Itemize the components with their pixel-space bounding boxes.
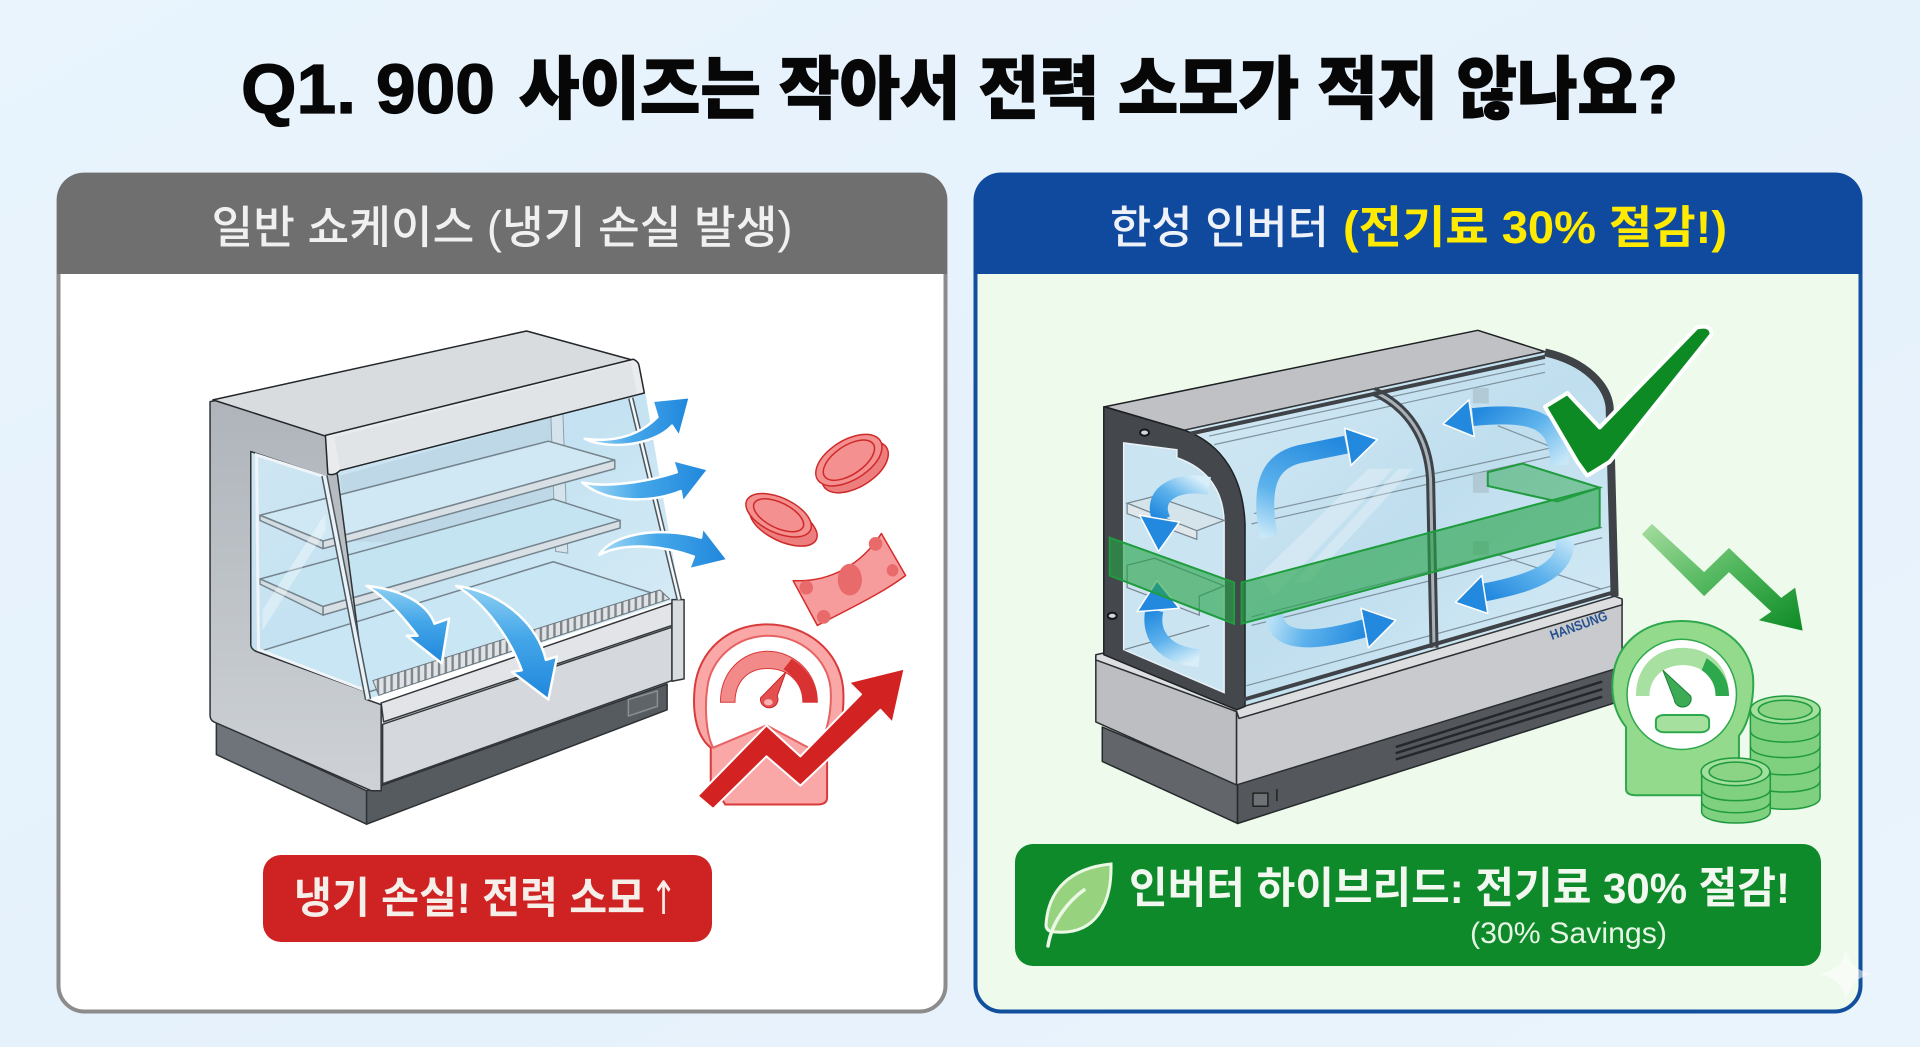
centre door frame [1373, 391, 1434, 648]
shelves [260, 441, 667, 693]
sparkle mark [1820, 950, 1872, 1000]
window and cabinet glass backing [251, 393, 680, 700]
base body [1096, 596, 1622, 785]
plinth [216, 684, 667, 824]
icon: leaf [1046, 864, 1111, 946]
lower front [381, 600, 684, 784]
panel body [58, 174, 946, 1012]
icon: red coins [735, 426, 901, 555]
arrow heads [1137, 400, 1488, 648]
callout headline: 인버터 하이브리드: 전기료 30% 절감! [1129, 865, 1790, 913]
panel header: Hansung inverter: 한성 인버터 [1110, 202, 1329, 253]
icon: red rising arrow [698, 669, 905, 809]
front glass [1184, 352, 1615, 706]
drain grille [373, 590, 670, 695]
side window frame [257, 455, 364, 690]
brand label: HANSUNG [1548, 608, 1609, 643]
icon: tall coin stack [1750, 696, 1820, 809]
icon: green meter [1612, 621, 1753, 795]
side shelves [1125, 496, 1224, 650]
top surface [1105, 330, 1545, 430]
side window glass [1124, 443, 1224, 693]
front glass post [324, 476, 368, 700]
check mark [1545, 327, 1712, 476]
right glass edge [631, 398, 679, 600]
curved air arrows [1153, 415, 1565, 658]
arrows escaping cold air [367, 397, 728, 700]
back wall [340, 417, 554, 548]
right dome frame [1545, 352, 1615, 596]
left frame with window [1104, 407, 1245, 710]
panel body [976, 174, 1860, 1012]
panel header: Hansung inverter [974, 173, 1862, 274]
panel header: general showcase: 일반 쇼케이스 (냉기 손실 발생) [212, 202, 792, 253]
plinth [1102, 669, 1615, 823]
title: Q1. 900 [241, 50, 495, 128]
illustration: inverter showcase with air curtain [1096, 327, 1820, 823]
icon: red meter [694, 624, 843, 805]
panel header: general showcase [57, 173, 947, 274]
green air curtain band [1110, 464, 1600, 624]
panel header: Hansung inverter: (전기료 30% 절감!) [1343, 202, 1727, 253]
up arrow mark: ↑ [650, 871, 677, 925]
title: 사이즈는 작아서 전력 소모가 적지 않나요? [519, 52, 1678, 128]
icon: red banknote [793, 534, 906, 625]
icon: short coin stack [1701, 758, 1770, 823]
canopy [213, 331, 644, 475]
callout: cold loss: 냉기 손실! 전력 소모 [294, 875, 645, 923]
shelves [1209, 364, 1612, 686]
side panel with window [210, 398, 381, 791]
vents [1396, 682, 1602, 759]
callout subtext: (30% Savings) [1470, 917, 1667, 950]
glass reflections [1259, 469, 1413, 596]
callout: 30% savings [1015, 844, 1821, 966]
illustration: open showcase with cold air loss [210, 331, 906, 824]
callout: cold loss [263, 855, 712, 942]
panel: Hansung inverter [974, 173, 1862, 1012]
panel: general showcase [57, 173, 947, 1012]
falling arrow [1642, 524, 1803, 631]
